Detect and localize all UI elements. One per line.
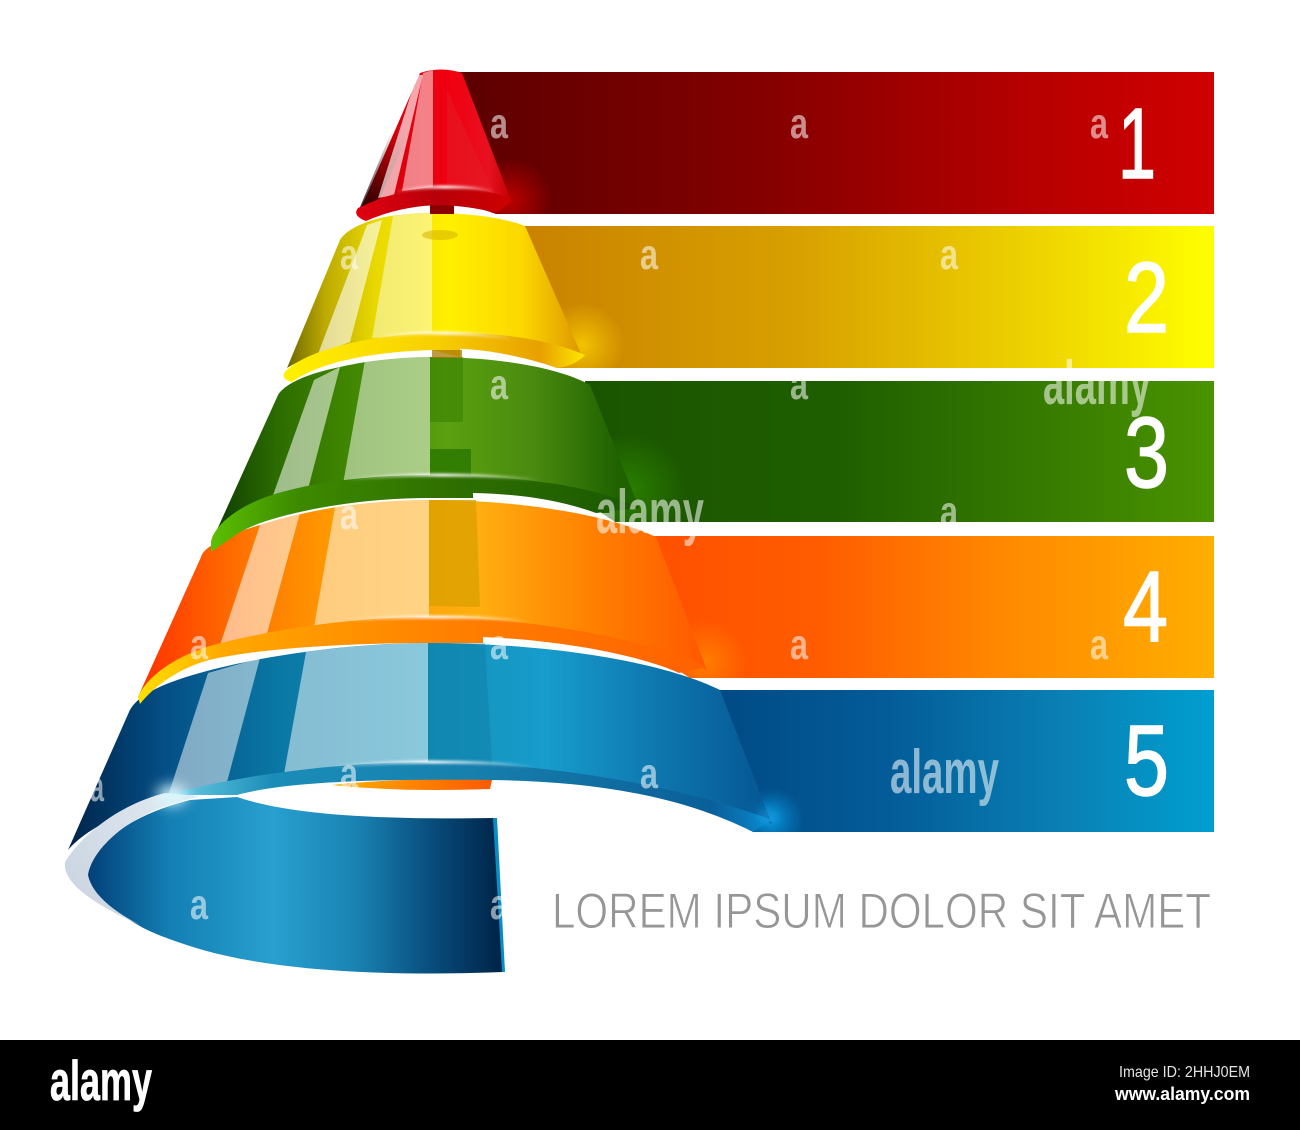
layer 4: orange band <box>138 500 707 704</box>
layer 2: yellow band <box>284 213 585 382</box>
red dark side <box>358 130 410 212</box>
watermark logos: alamy <box>890 738 999 807</box>
watermark letters: a <box>340 491 359 539</box>
footer bar <box>0 1040 1300 1130</box>
watermark letters: a <box>340 231 359 279</box>
blue rim white edge <box>65 793 200 925</box>
blue glints <box>157 762 777 823</box>
orange gloss stripes <box>219 500 480 648</box>
watermark letters: a <box>640 750 659 798</box>
watermark letters: a <box>790 621 809 669</box>
watermark letters: a <box>790 100 809 148</box>
red rim <box>356 187 512 221</box>
layer 3: green band <box>211 357 640 552</box>
watermark letters: a <box>640 231 659 279</box>
layer 5: blue band <box>65 643 777 925</box>
watermark letters: a <box>940 231 959 279</box>
bar 2 <box>520 226 1214 368</box>
bar 1 <box>455 72 1214 214</box>
image id: Image ID: 2HHJ0EM <box>1119 1064 1250 1081</box>
green gloss stripes <box>272 357 471 498</box>
website: www.alamy.com <box>1114 1084 1250 1104</box>
watermark letters: a <box>90 763 105 811</box>
bar 4 <box>650 536 1214 678</box>
watermark letters: a <box>1090 621 1109 669</box>
footer logo: alamy <box>50 1049 152 1112</box>
green rim <box>211 475 640 552</box>
number 3: 3 <box>1124 397 1169 509</box>
watermark letters: a <box>490 881 509 929</box>
orange glint <box>345 617 530 622</box>
watermark letters: a <box>1090 100 1109 148</box>
watermark letters: a <box>190 621 209 669</box>
yellow rim <box>284 333 585 382</box>
watermark letters <box>90 100 1109 929</box>
green glint <box>345 475 540 480</box>
number 2: 2 <box>1124 242 1169 354</box>
yellow gloss stripes <box>318 213 458 354</box>
layer 1: red cap <box>356 70 512 221</box>
number 5: 5 <box>1124 705 1169 817</box>
watermark letters: a <box>790 361 809 409</box>
blue rim <box>165 762 772 832</box>
watermark logos <box>596 349 1151 807</box>
number 1: 1 <box>1118 88 1156 200</box>
watermark logos: alamy <box>1043 349 1151 418</box>
orange layer underside <box>332 779 492 790</box>
number 4: 4 <box>1123 551 1168 663</box>
watermark letters: a <box>340 750 359 798</box>
yellow glint <box>375 333 515 339</box>
blue gloss stripes <box>167 643 492 799</box>
watermark letters: a <box>490 100 509 148</box>
bar 3 <box>585 381 1214 522</box>
red glint <box>395 187 495 192</box>
watermark letters: a <box>940 488 959 536</box>
orange rim <box>138 617 707 704</box>
watermark letters: a <box>490 621 509 669</box>
yellow post <box>432 350 462 358</box>
watermark letters: a <box>490 361 509 409</box>
red gloss stripes <box>378 70 495 198</box>
spiral interior band <box>86 797 505 974</box>
watermark logos: alamy <box>596 478 704 547</box>
bar 5 <box>715 690 1214 832</box>
watermark letters: a <box>190 881 209 929</box>
red post <box>430 204 454 214</box>
